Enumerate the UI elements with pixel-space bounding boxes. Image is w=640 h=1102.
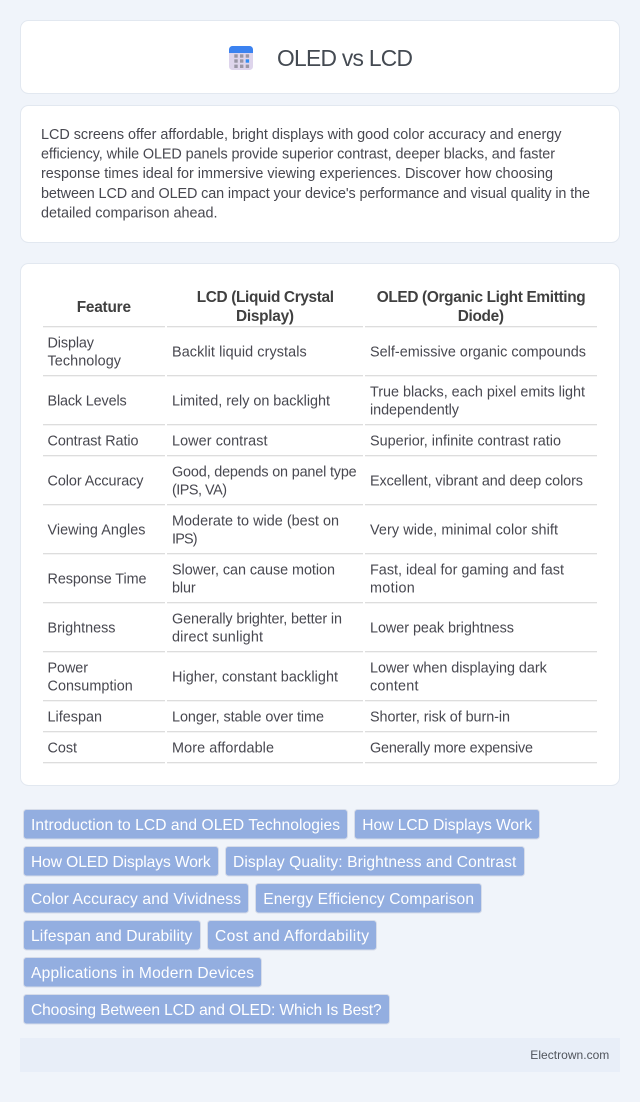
row: viewing angles: IPS): [172, 532, 198, 548]
tag: lifespan: [24, 920, 200, 950]
row: viewing angles: Viewing Angles: [48, 522, 146, 538]
row: cost: Cost: [48, 740, 77, 756]
row: power consumption: Higher, constant backlight: [172, 670, 338, 686]
topic tags: [24, 810, 540, 1024]
row: display technology: Technology: [48, 354, 122, 370]
row: display technology: [48, 336, 586, 370]
row: black levels: Limited, rely on backlight: [172, 394, 330, 410]
row: black levels: Black Levels: [48, 394, 127, 410]
row: contrast ratio: Lower contrast: [172, 434, 268, 450]
tag: applications: Applications in Modern Devices: [31, 965, 254, 982]
row: cost: [48, 740, 533, 756]
table header row: Feature: [77, 299, 131, 316]
row: color accuracy: Excellent, vibrant and deep colors: [370, 474, 583, 490]
tag: applications: [24, 958, 262, 987]
row: lifespan: Longer, stable over time: [172, 710, 324, 726]
tag: how OLED works: How OLED Displays Work: [31, 854, 211, 871]
intro text: LCD screens offer affordable, bright displays with good color accuracy and energy: [41, 127, 562, 143]
row: response time: [48, 562, 564, 596]
row: brightness: [48, 612, 514, 646]
row: color accuracy: Good, depends on panel type: [172, 464, 357, 480]
tag: color accuracy: [24, 884, 248, 913]
row: black levels: True blacks, each pixel emits light: [370, 384, 585, 400]
row: response time: Slower, can cause motion: [172, 562, 335, 578]
row: cost: Generally more expensive: [370, 740, 533, 756]
row: color accuracy: Color Accuracy: [48, 474, 144, 490]
tag: how LCD works: [354, 810, 540, 839]
row: power consumption: Lower when displaying dark: [370, 660, 548, 676]
footer: [20, 1038, 620, 1072]
row: color accuracy: [48, 464, 583, 498]
row: response time: Response Time: [48, 572, 146, 588]
row: contrast ratio: [48, 434, 561, 450]
tag: introduction: [24, 810, 348, 839]
row: brightness: Brightness: [48, 620, 116, 636]
row: contrast ratio: Contrast Ratio: [48, 434, 138, 450]
row: display technology: Self-emissive organic compounds: [370, 344, 586, 360]
row: lifespan: Lifespan: [48, 710, 102, 726]
row: response time: Fast, ideal for gaming and fast: [370, 562, 564, 578]
row: brightness: Generally brighter, better in: [172, 612, 342, 628]
row: brightness: direct sunlight: [172, 630, 263, 646]
intro text: detailed comparison ahead.: [41, 205, 218, 221]
row: power consumption: [48, 660, 548, 694]
row: brightness: Lower peak brightness: [370, 620, 514, 636]
table header row: Display): [236, 308, 294, 325]
tag: lifespan: Lifespan and Durability: [31, 928, 193, 945]
row: viewing angles: Moderate to wide (best on: [172, 514, 339, 530]
row: response time: motion: [370, 580, 415, 596]
row: lifespan: [48, 710, 510, 726]
intro text: response times ideal for immersive viewing experiences. Discover how choosing: [41, 166, 553, 182]
row: lifespan: Shorter, risk of burn-in: [370, 710, 510, 726]
row: color accuracy: (IPS, VA): [172, 482, 227, 498]
panel: comparison table: [20, 264, 620, 786]
tag: how LCD works: How LCD Displays Work: [362, 817, 532, 834]
tag: introduction: Introduction to LCD and OLED Technologies: [31, 817, 340, 834]
tag: energy efficiency: Energy Efficiency Comparison: [263, 891, 474, 908]
row: viewing angles: Very wide, minimal color shift: [370, 522, 558, 538]
row: display technology: Backlit liquid crystals: [172, 344, 307, 360]
intro text: efficiency, while OLED panels provide superior contrast, deeper blacks, and faster: [41, 147, 555, 163]
tag: choosing: [24, 994, 390, 1024]
table header row: LCD (Liquid Crystal: [197, 289, 334, 306]
intro text: between LCD and OLED can impact your device's performance and visual quality in the: [41, 186, 590, 202]
tag: color accuracy: Color Accuracy and Vividness: [31, 891, 241, 908]
table header row: Diode): [458, 308, 504, 325]
footer: Electrown.com: [530, 1048, 609, 1062]
table header row: OLED (Organic Light Emitting: [377, 289, 586, 306]
tag: energy efficiency: [256, 884, 482, 913]
title: OLED vs LCD: [277, 45, 413, 71]
row: contrast ratio: Superior, infinite contrast ratio: [370, 434, 561, 450]
tag: display quality: [226, 846, 524, 876]
tag: choosing: Choosing Between LCD and OLED: Which Is Best?: [31, 1002, 382, 1019]
intro panel: [20, 106, 620, 242]
row: black levels: independently: [370, 402, 460, 418]
row: response time: blur: [172, 580, 196, 596]
row: cost: More affordable: [172, 740, 274, 756]
table header row: [77, 289, 586, 325]
row: display technology: Display: [48, 336, 95, 352]
header panel: [20, 20, 620, 94]
icon: display grid: [229, 46, 253, 70]
row: power consumption: content: [370, 678, 418, 694]
tag: how OLED works: [24, 846, 218, 876]
row: viewing angles: [48, 514, 558, 548]
row: power consumption: Consumption: [48, 678, 133, 694]
tag: display quality: Display Quality: Brightness and Contrast: [233, 854, 517, 871]
intro text: [41, 127, 590, 221]
row: power consumption: Power: [48, 660, 88, 676]
tag: cost: [208, 920, 376, 950]
tag: cost: Cost and Affordability: [215, 928, 369, 945]
row: black levels: [48, 384, 585, 418]
